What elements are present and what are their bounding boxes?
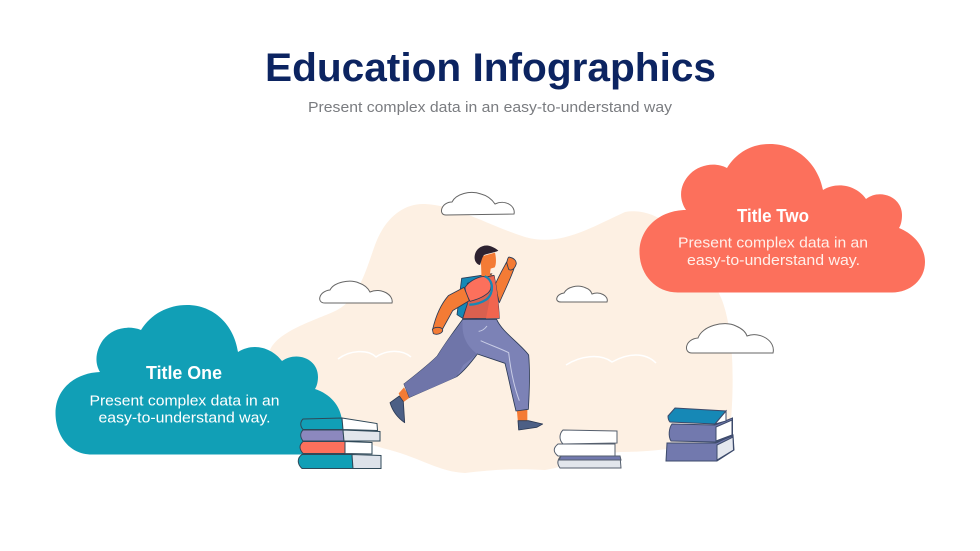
book: teal bottom (298, 454, 381, 468)
backpack (457, 275, 490, 318)
pants (404, 319, 529, 411)
subtitle: Present complex data in an easy-to-understand way (308, 99, 673, 116)
cloud outline: lower right (686, 324, 773, 353)
book stack middle (554, 430, 621, 468)
back foot (399, 387, 410, 403)
cloud outline: small right (557, 286, 607, 302)
book: bottom cover (559, 456, 621, 460)
teal cloud text (90, 392, 280, 426)
mouth (490, 273, 493, 275)
teal cloud callout (56, 305, 342, 454)
red cloud text: Present complex data in an (678, 234, 868, 252)
hair (475, 246, 498, 265)
running student illustration (390, 246, 543, 430)
teal cloud shape (56, 305, 342, 454)
book: top white (560, 430, 617, 444)
book: top teal (301, 418, 378, 430)
book: bottom purple (666, 435, 734, 461)
rear arm (433, 287, 469, 330)
red cloud title: Title Two (737, 205, 809, 226)
faint white arcs (338, 351, 656, 365)
red cloud text (678, 234, 868, 269)
pants highlights (481, 341, 519, 401)
neck and head (481, 253, 496, 280)
red cloud callout (640, 144, 925, 292)
pants shadow (404, 322, 477, 397)
backpack strap (469, 276, 492, 305)
book: red (300, 442, 372, 454)
title: Education Infographics (265, 46, 716, 90)
teal cloud title: Title One (146, 362, 222, 383)
shirt sleeve (465, 277, 491, 301)
raised fist (507, 257, 516, 270)
cloud outline: left (320, 281, 392, 303)
red cloud text: easy-to-understand way. (687, 252, 860, 269)
red cloud shape (640, 144, 925, 292)
book: bottom (558, 456, 621, 468)
book: purple (301, 430, 380, 441)
book: top blue (668, 408, 726, 424)
book stack left (298, 418, 381, 468)
raised arm (495, 262, 514, 303)
shirt (463, 275, 499, 319)
book: middle white (554, 444, 615, 456)
shirt highlight (486, 276, 499, 318)
teal cloud text: Present complex data in an (90, 392, 280, 410)
teal cloud text: easy-to-understand way. (98, 410, 270, 426)
background blob (270, 204, 733, 473)
book stack right (666, 408, 734, 461)
book: middle purple (669, 418, 732, 442)
front foot (517, 408, 527, 423)
rear fist (432, 327, 443, 334)
cloud outline: top centre (441, 192, 514, 215)
